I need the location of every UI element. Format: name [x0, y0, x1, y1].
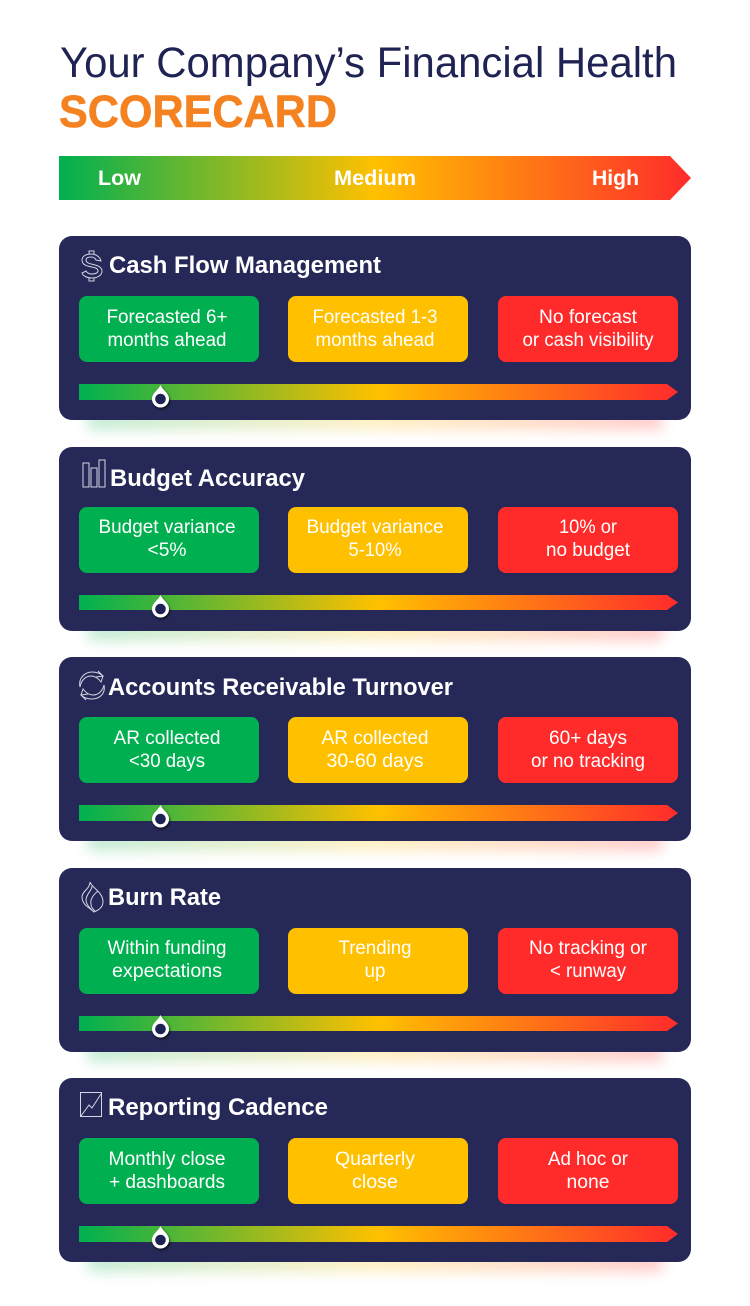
high card: [498, 928, 678, 994]
low card: [79, 296, 259, 362]
heading: Cash Flow Management: [109, 252, 381, 279]
low card: <5%: [148, 540, 187, 561]
marker: [152, 1015, 169, 1038]
high card: no budget: [546, 540, 631, 561]
high card: No forecast: [539, 307, 638, 328]
score track: [79, 595, 678, 610]
marker: [152, 805, 169, 828]
heading: Burn Rate: [108, 884, 221, 911]
icon: bar chart: [83, 460, 105, 487]
panel: Cash Flow Management: [59, 236, 691, 429]
low card: expectations: [112, 961, 222, 982]
low card: months ahead: [108, 330, 226, 351]
panel: Accounts Receivable Turnover: [59, 657, 691, 850]
medium card: Budget variance: [306, 517, 444, 538]
high card: No tracking or: [529, 938, 648, 959]
medium card: up: [364, 961, 386, 982]
low card: + dashboards: [109, 1172, 225, 1193]
heading: Accounts Receivable Turnover: [108, 674, 453, 701]
medium card: Quarterly: [335, 1149, 416, 1170]
high card: none: [566, 1172, 610, 1193]
icon: dollar sign: [82, 251, 102, 281]
score track: [79, 805, 678, 821]
medium card: AR collected: [322, 728, 428, 749]
medium card: [288, 717, 468, 783]
medium card: [288, 507, 468, 573]
medium card: [288, 1138, 468, 1204]
icon: circular arrows: [80, 671, 104, 700]
title: [59, 39, 677, 137]
marker: [152, 385, 169, 408]
legend arrow: low to high: Medium: [334, 167, 416, 190]
heading: Reporting Cadence: [108, 1094, 328, 1121]
low card: [79, 507, 259, 573]
low card: [79, 1138, 259, 1204]
title line: SCORECARD: SCORECARD: [59, 86, 337, 137]
score track: [79, 384, 678, 400]
icon: flame: [82, 882, 103, 912]
low card: [79, 928, 259, 994]
icon: line chart: [80, 1092, 102, 1116]
high card: 60+ days: [549, 728, 627, 749]
medium card: months ahead: [316, 330, 434, 351]
medium card: 30-60 days: [326, 751, 424, 772]
low card: Budget variance: [98, 517, 236, 538]
score track: [79, 1226, 678, 1242]
medium card: [288, 928, 468, 994]
high card: or cash visibility: [522, 330, 654, 351]
high card: < runway: [550, 961, 626, 982]
medium card: 5-10%: [348, 540, 402, 561]
medium card: close: [352, 1172, 398, 1193]
low card: <30 days: [129, 751, 205, 772]
low card: [79, 717, 259, 783]
low card: Forecasted 6+: [106, 307, 228, 328]
medium card: Forecasted 1-3: [312, 307, 438, 328]
title line: Your Company's Financial Health: Your Company’s Financial Health: [60, 39, 677, 87]
score track: [79, 1016, 678, 1031]
low card: Within funding: [108, 938, 226, 959]
medium card: Trending: [338, 938, 412, 959]
panel: Reporting Cadence: [59, 1078, 691, 1271]
legend arrow: low to high: High: [592, 167, 639, 190]
medium card: [288, 296, 468, 362]
high card: Ad hoc or: [548, 1149, 629, 1170]
high card: 10% or: [559, 517, 618, 538]
legend arrow: low to high: [59, 156, 691, 200]
low card: AR collected: [114, 728, 220, 749]
heading: Budget Accuracy: [110, 465, 306, 492]
marker: [152, 595, 169, 618]
legend arrow: low to high: Low: [98, 167, 142, 190]
high card: [498, 507, 678, 573]
high card: or no tracking: [531, 751, 645, 772]
marker: [152, 1226, 169, 1248]
high card: [498, 296, 678, 362]
high card: [498, 1138, 678, 1204]
low card: Monthly close: [108, 1149, 226, 1170]
high card: [498, 717, 678, 783]
panel: Budget Accuracy: [59, 447, 691, 640]
panel: Burn Rate: [59, 868, 691, 1061]
